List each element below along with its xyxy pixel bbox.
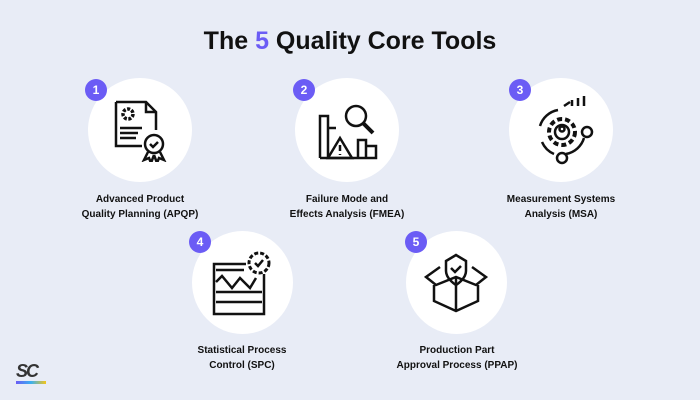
label 3: Analysis (MSA)	[525, 209, 597, 220]
circle 4	[192, 231, 293, 334]
label 4: Control (SPC)	[209, 360, 275, 371]
label 1: Quality Planning (APQP)	[82, 209, 198, 220]
logo	[16, 361, 46, 384]
label 2: Failure Mode and	[306, 194, 388, 205]
badge 2	[293, 79, 315, 101]
panel: MSA	[507, 78, 615, 220]
label 3	[507, 194, 615, 220]
badge 1	[85, 79, 107, 101]
icon: control chart	[212, 252, 270, 316]
label 3: Measurement Systems	[507, 194, 615, 205]
panel: PPAP	[396, 231, 517, 371]
panel: FMEA	[290, 78, 404, 220]
icon: gear cycle	[538, 96, 594, 164]
panel: SPC	[189, 231, 293, 371]
label 1	[82, 194, 198, 220]
badge 5	[405, 231, 427, 253]
circle 5	[406, 231, 507, 334]
icon: certificate	[114, 100, 166, 162]
circle 3	[509, 78, 613, 182]
label 4: Statistical Process	[198, 345, 286, 356]
badge 1: 1	[93, 83, 99, 97]
label 2	[290, 194, 404, 220]
badge 3	[509, 79, 531, 101]
circle 2	[295, 78, 399, 182]
badge 4	[189, 231, 211, 253]
label 5	[396, 345, 517, 371]
label 5: Production Part	[419, 345, 494, 356]
badge 5: 5	[413, 235, 419, 249]
title: The 5 Quality Core Tools	[204, 27, 496, 55]
badge 2: 2	[301, 83, 307, 97]
label 4	[198, 345, 286, 371]
badge 3: 3	[517, 83, 523, 97]
logo: SC	[16, 361, 37, 381]
icon: box shield	[424, 254, 488, 312]
panel: APQP	[82, 78, 198, 220]
icon: magnifier chart	[318, 104, 378, 160]
circle 1	[88, 78, 192, 182]
label 5: Approval Process (PPAP)	[397, 360, 517, 371]
label 2: Effects Analysis (FMEA)	[290, 209, 404, 220]
badge 4: 4	[197, 235, 203, 249]
label 1: Advanced Product	[96, 194, 184, 205]
